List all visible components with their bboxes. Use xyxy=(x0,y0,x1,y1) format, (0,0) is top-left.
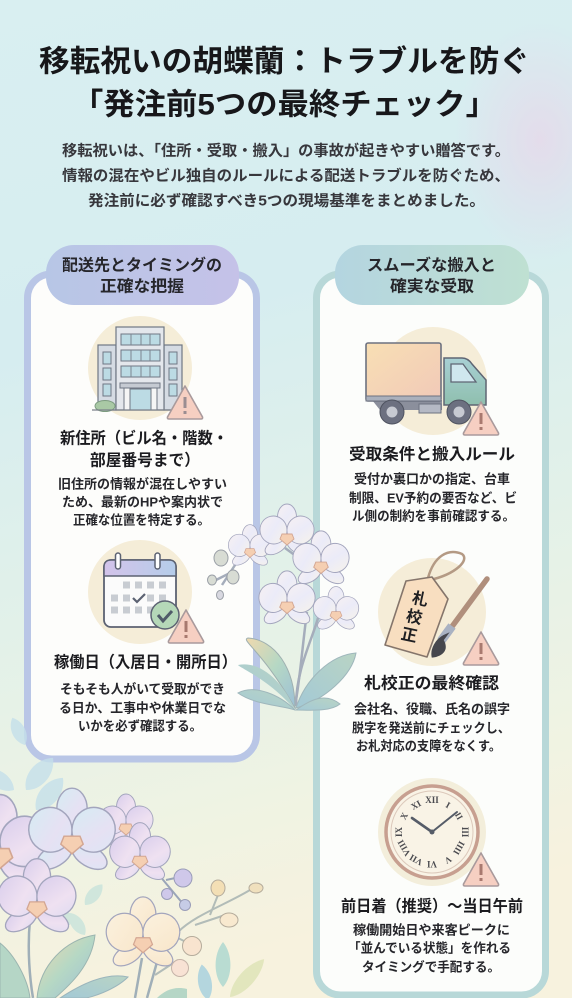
item text: working day: そもそも人がいて受取ができ xyxy=(60,682,225,696)
item text: arrival timing: 「並んでいる状態」を作れる xyxy=(348,940,511,956)
icon: wall clock: II xyxy=(453,810,465,822)
item text: receiving conditions: 制限、EV予約の要否など、ビ xyxy=(349,490,517,506)
icon: wall clock: X xyxy=(398,810,410,821)
item heading: new address: 部屋番号まで） xyxy=(90,452,200,470)
pill heading left xyxy=(46,245,239,305)
item text: receiving conditions: 受付か裏口かの指定、台車 xyxy=(354,472,510,486)
icon: wooden tag and brush: 札 xyxy=(410,589,430,610)
icon: wall clock: V xyxy=(442,854,453,866)
item text: receiving conditions: ル側の制約を事前確認する。 xyxy=(352,508,515,524)
illustration: bottom-left orchids xyxy=(0,715,270,998)
illustration: central orchid xyxy=(208,504,361,710)
item text: tag proofreading: 脱字を発送前にチェックし、 xyxy=(352,720,510,736)
panel: delivery destination and timing xyxy=(28,245,256,759)
intro text xyxy=(62,142,510,210)
item text: receiving conditions xyxy=(349,472,517,524)
icon: wall clock: VI xyxy=(427,859,437,869)
item text: new address: 正確な位置を特定する。 xyxy=(73,512,210,528)
icon: warning triangle xyxy=(463,853,499,886)
pill heading right xyxy=(335,245,529,305)
icon: wall clock: IX xyxy=(394,827,404,837)
item heading: new address xyxy=(60,428,228,470)
icon: warning triangle xyxy=(463,402,499,435)
item heading: tag proofreading: 札校正の最終確認 xyxy=(364,674,499,692)
icon: warning triangle xyxy=(463,632,499,665)
item text: arrival timing: 稼働開始日や来客ピークに xyxy=(353,922,510,938)
icon: wall clock: III xyxy=(460,827,470,838)
icon: wall clock: XI xyxy=(409,798,423,812)
item heading: working day: 稼働日（入居日・開所日） xyxy=(54,654,237,672)
icon: delivery truck xyxy=(366,327,487,435)
title: 「発注前5つの最終チェック」 xyxy=(72,88,497,122)
icon: wooden tag and brush xyxy=(378,552,487,666)
icon: wall clock: XII xyxy=(425,795,439,805)
intro text: 発注前に必ず確認すべき5つの現場基準をまとめました。 xyxy=(88,192,485,210)
item text: tag proofreading: お札対応の支障をなくす。 xyxy=(356,738,501,754)
background watercolor wash xyxy=(455,20,572,260)
item text: tag proofreading: 会社名、役職、氏名の誤字 xyxy=(354,702,510,716)
item heading: new address: 新住所（ビル名・階数・ xyxy=(60,428,228,448)
item text: tag proofreading xyxy=(352,702,510,754)
pill heading left: 配送先とタイミングの xyxy=(62,256,222,274)
pale background foliage xyxy=(0,715,107,938)
icon: wall clock xyxy=(378,778,486,886)
item text: arrival timing: タイミングで手配する。 xyxy=(362,960,500,974)
intro text: 情報の混在やビル独自のルールによる配送トラブルを防ぐため、 xyxy=(62,166,510,184)
icon: wall clock: IIII xyxy=(451,839,467,857)
icon: wall clock: VIII xyxy=(395,838,413,858)
title xyxy=(39,44,530,122)
item text: working day: いかを必ず確認する。 xyxy=(78,718,202,734)
pill heading right: 確実な受取 xyxy=(390,276,474,296)
item text: new address: ため、最新のHPや案内状で xyxy=(62,494,223,510)
icon: wooden tag and brush: 校 xyxy=(404,606,424,628)
item text: working day xyxy=(59,682,226,734)
title: 移転祝いの胡蝶蘭：トラブルを防ぐ xyxy=(39,44,530,78)
icon: office building xyxy=(88,316,192,420)
intro text: 移転祝いは、「住所・受取・搬入」の事故が起きやすい贈答です。 xyxy=(62,142,510,160)
item text: new address: 旧住所の情報が混在しやすい xyxy=(58,476,227,492)
item text: arrival timing xyxy=(348,922,511,974)
icon: wall clock: I xyxy=(444,800,452,810)
panel: smooth delivery and receipt xyxy=(316,245,546,995)
item text: new address xyxy=(58,476,227,528)
icon: calendar xyxy=(88,540,192,644)
pill heading right: スムーズな搬入と xyxy=(367,256,496,274)
pill heading left: 正確な把握 xyxy=(100,276,184,296)
icon: warning triangle xyxy=(167,386,203,419)
icon: green check badge xyxy=(151,601,179,629)
icon: wall clock: VII xyxy=(407,852,424,868)
item heading: arrival timing: 前日着（推奨）～当日午前 xyxy=(341,896,523,916)
item heading: receiving conditions: 受取条件と搬入ルール xyxy=(349,444,515,464)
icon: wooden tag and brush: 正 xyxy=(399,626,419,646)
item text: working day: る日か、工事中や休業日でな xyxy=(59,700,226,716)
icon: warning triangle xyxy=(168,610,204,643)
